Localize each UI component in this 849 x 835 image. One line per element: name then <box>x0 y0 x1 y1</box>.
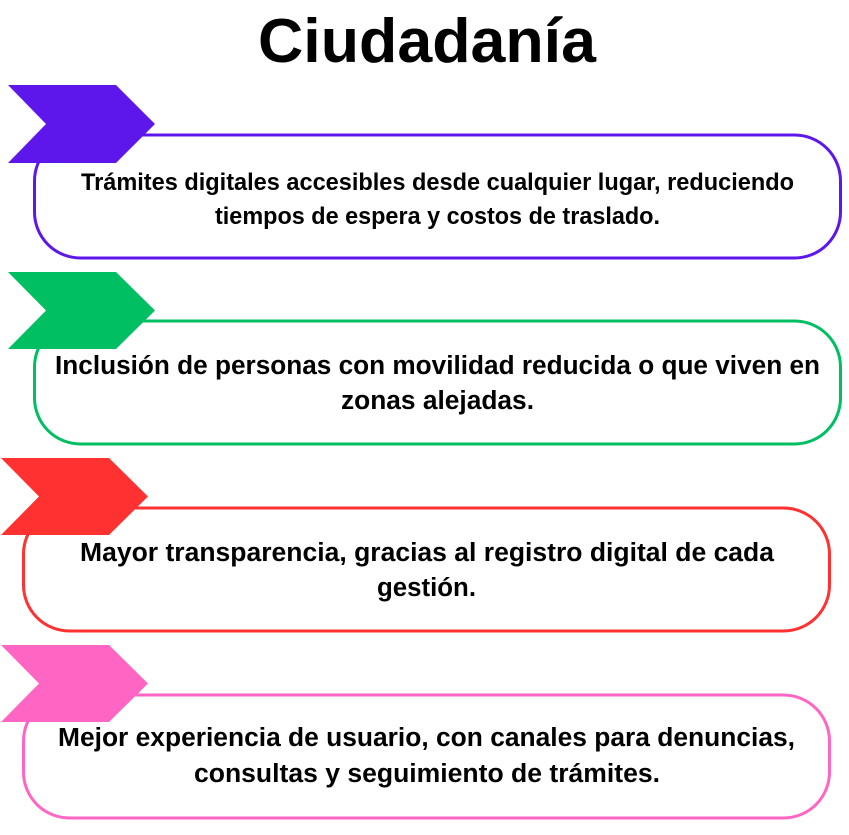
card outline <box>24 508 830 631</box>
card text: gestión. <box>377 574 476 602</box>
card outline <box>34 135 840 258</box>
icon: purple chevron <box>8 85 155 163</box>
card text: consultas y seguimiento de trámites. <box>194 760 660 788</box>
card text: zonas alejadas. <box>341 387 534 415</box>
icon: pink chevron <box>1 645 148 722</box>
panel: user experience <box>1 645 830 818</box>
card text: Trámites digitales accesibles desde cualquier lugar, reduciendo <box>81 169 794 196</box>
card text: tiempos de espera y costos de traslado. <box>215 203 660 230</box>
title: Ciudadanía <box>258 7 597 76</box>
icon: red chevron <box>1 458 148 535</box>
card outline <box>24 695 830 818</box>
card text: Inclusión de personas con movilidad reducida o que viven en <box>55 352 820 380</box>
panel: digital procedures <box>8 85 840 258</box>
panel: inclusion <box>8 272 840 444</box>
card outline <box>34 321 840 444</box>
icon: green chevron <box>8 272 155 349</box>
card text: Mejor experiencia de usuario, con canales para denuncias, <box>58 724 795 752</box>
panel: transparency <box>1 458 830 631</box>
card text: Mayor transparencia, gracias al registro digital de cada <box>80 539 775 567</box>
